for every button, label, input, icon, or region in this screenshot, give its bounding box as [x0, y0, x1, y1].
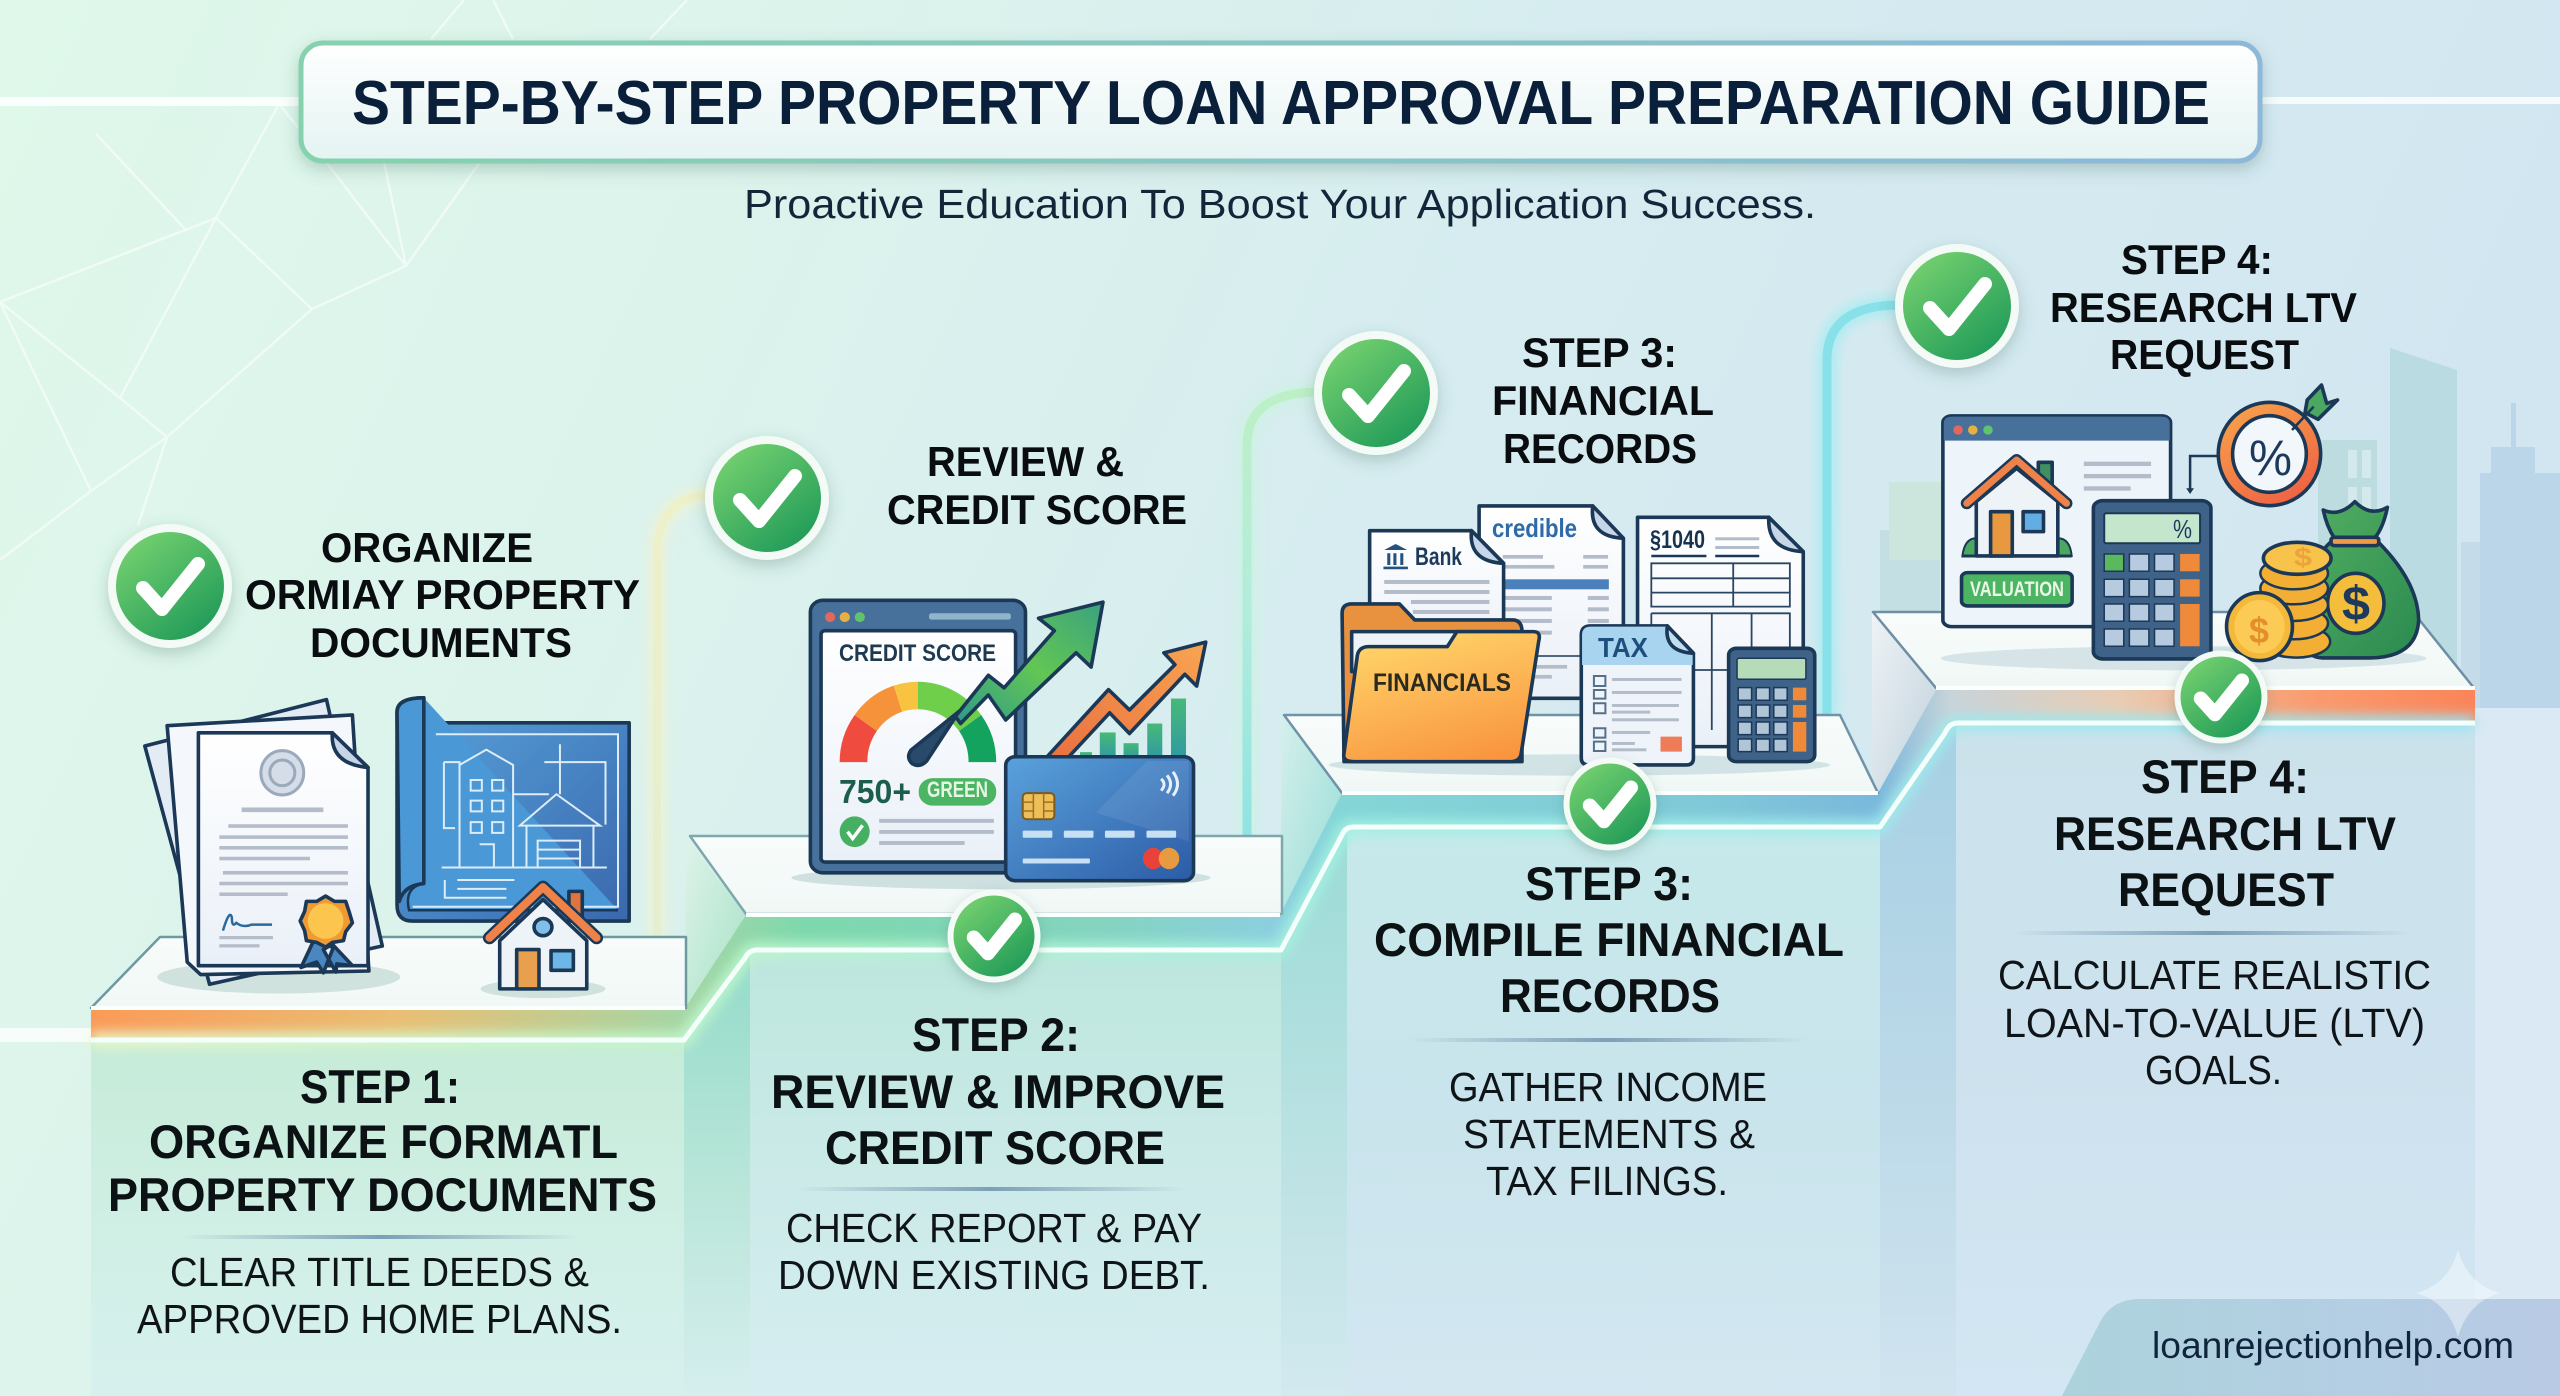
check badge step 3 lower	[1564, 758, 1656, 850]
colored platform edge band	[91, 688, 2475, 1040]
step 3 top label	[1492, 329, 1714, 472]
title banner: STEP-BY-STEP PROPERTY LOAN APPROVAL PREPARATION GUIDE	[352, 69, 2210, 138]
icon: credit score screen, arrows and card: CREDIT SCORE	[839, 640, 996, 667]
step 1 text	[108, 1060, 657, 1342]
check badge step 2 lower	[948, 890, 1040, 982]
step 3 text: COMPILE FINANCIAL	[1374, 913, 1844, 966]
footer website badge: loanrejectionhelp.com	[2152, 1325, 2514, 1366]
subtitle: Proactive Education To Boost Your Application Success.	[744, 181, 1816, 227]
icon: valuation, calculator, target and money: $	[2294, 542, 2313, 572]
icon: financial documents, folder and calculator: credible	[1492, 513, 1577, 543]
platform front light rims	[91, 688, 2475, 1008]
skyline silhouette	[1880, 348, 2560, 770]
icon: valuation, calculator, target and money: $	[2249, 610, 2269, 651]
icon: financial documents, folder and calculator: TAX	[1598, 632, 1648, 663]
background polygon lines top left	[0, 0, 687, 560]
step 1 text: STEP 1:	[300, 1060, 460, 1113]
icon: financial documents, folder and calculator: FINANCIALS	[1373, 669, 1511, 697]
step 3 text: TAX FILINGS.	[1486, 1158, 1728, 1204]
icon: financial documents, folder and calculator: Bank	[1415, 543, 1462, 571]
icon: credit score screen, arrows and card: 750+	[839, 773, 911, 810]
step 2 text	[771, 1008, 1225, 1298]
icon: financial documents, folder and calculator	[1329, 506, 1830, 776]
step 1 text: PROPERTY DOCUMENTS	[108, 1168, 657, 1221]
step 2 text: STEP 2:	[912, 1008, 1080, 1061]
connector 2 to 3	[1247, 392, 1320, 840]
step 2 top label: CREDIT SCORE	[887, 486, 1187, 533]
glow bars beside title	[0, 97, 2560, 1042]
step 3 top label: RECORDS	[1503, 425, 1697, 472]
step 4 text: REQUEST	[2118, 863, 2334, 916]
step 1 top label: ORGANIZE	[321, 524, 533, 571]
step 4 text: GOALS.	[2145, 1047, 2282, 1093]
icon: valuation, calculator, target and money: %	[2249, 430, 2292, 486]
step 3 text: STATEMENTS &	[1463, 1111, 1755, 1157]
step 3 text: GATHER INCOME	[1449, 1064, 1767, 1110]
check badge step 1 top	[108, 524, 232, 648]
step 1 text: ORGANIZE FORMATL	[149, 1115, 618, 1168]
platform 4	[1873, 612, 2474, 688]
check badge step 2 top	[705, 436, 829, 560]
step 4 text	[1998, 750, 2431, 1093]
icon: valuation, calculator, target and money: $	[2342, 578, 2370, 631]
step 4 top label	[2050, 236, 2357, 378]
step 3 text: RECORDS	[1500, 969, 1720, 1022]
step 3 top label: STEP 3:	[1522, 329, 1677, 376]
step 1 top label: ORMIAY PROPERTY	[245, 571, 640, 618]
step 1 top label	[245, 524, 640, 666]
step 3 text	[1374, 857, 1844, 1204]
glowing staircase line	[91, 723, 2475, 1040]
step 1 text: CLEAR TITLE DEEDS &	[170, 1249, 589, 1295]
step panel backgrounds and staircase	[91, 612, 2560, 1396]
icon: credit score screen, arrows and card	[791, 600, 1211, 889]
connector 1 to 2	[657, 494, 712, 940]
icon: financial documents, folder and calculator: §1040	[1650, 526, 1705, 554]
step 2 text: CHECK REPORT & PAY	[786, 1205, 1202, 1251]
icon: valuation, calculator, target and money: VALUATION	[1970, 578, 2064, 601]
platform 3	[1284, 715, 1878, 793]
step 4 text: RESEARCH LTV	[2054, 807, 2397, 860]
step 3 text: STEP 3:	[1525, 857, 1693, 910]
check badge step 4 lower	[2174, 650, 2268, 744]
icon: valuation, calculator, target and money	[1941, 385, 2426, 670]
step 1 text: APPROVED HOME PLANS.	[137, 1296, 622, 1342]
platform 1	[91, 937, 686, 1008]
icon: valuation, calculator, target and money: %	[2173, 514, 2192, 544]
step 2 text: REVIEW & IMPROVE	[771, 1065, 1225, 1118]
background polygon lines bottom right	[1997, 967, 2560, 1396]
title banner	[301, 43, 2260, 161]
step 4 text: CALCULATE REALISTIC	[1998, 952, 2431, 998]
step 2 text: DOWN EXISTING DEBT.	[778, 1252, 1210, 1298]
icon: credit score screen, arrows and card: GREEN	[927, 777, 988, 802]
step 4 top label: RESEARCH LTV	[2050, 284, 2357, 331]
step 2 top label	[887, 438, 1187, 533]
step 1 top label: DOCUMENTS	[310, 619, 572, 666]
icon: documents, blueprint and house	[145, 698, 629, 998]
footer website badge	[2062, 1250, 2560, 1396]
step 4 top label: REQUEST	[2110, 331, 2299, 378]
step 4 text: LOAN-TO-VALUE (LTV)	[2004, 1000, 2425, 1046]
step 4 text: STEP 4:	[2141, 750, 2309, 803]
connector 3 to 4	[1827, 305, 1900, 720]
step 3 top label: FINANCIAL	[1492, 377, 1714, 424]
step 2 top label: REVIEW &	[927, 438, 1124, 485]
step 4 top label: STEP 4:	[2121, 236, 2273, 283]
check badge step 3 top	[1314, 331, 1438, 455]
check badge step 4 top	[1895, 244, 2019, 368]
platform 2	[690, 836, 1282, 914]
step 2 text: CREDIT SCORE	[825, 1121, 1165, 1174]
